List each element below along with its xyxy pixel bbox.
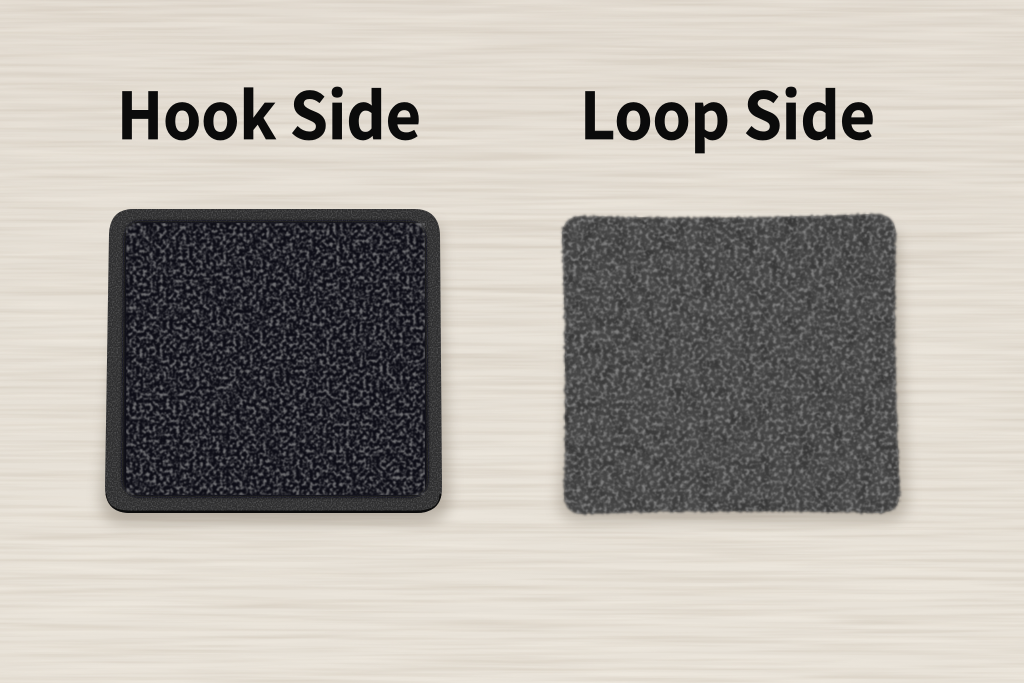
loop texture field — [558, 210, 904, 518]
heading: Hook Side: Hook Side — [117, 66, 421, 158]
panel: loop side patch — [558, 210, 908, 522]
hook texture field — [122, 221, 428, 497]
heading: Loop Side: Loop Side — [580, 66, 875, 158]
panel: hook side patch — [100, 205, 450, 524]
